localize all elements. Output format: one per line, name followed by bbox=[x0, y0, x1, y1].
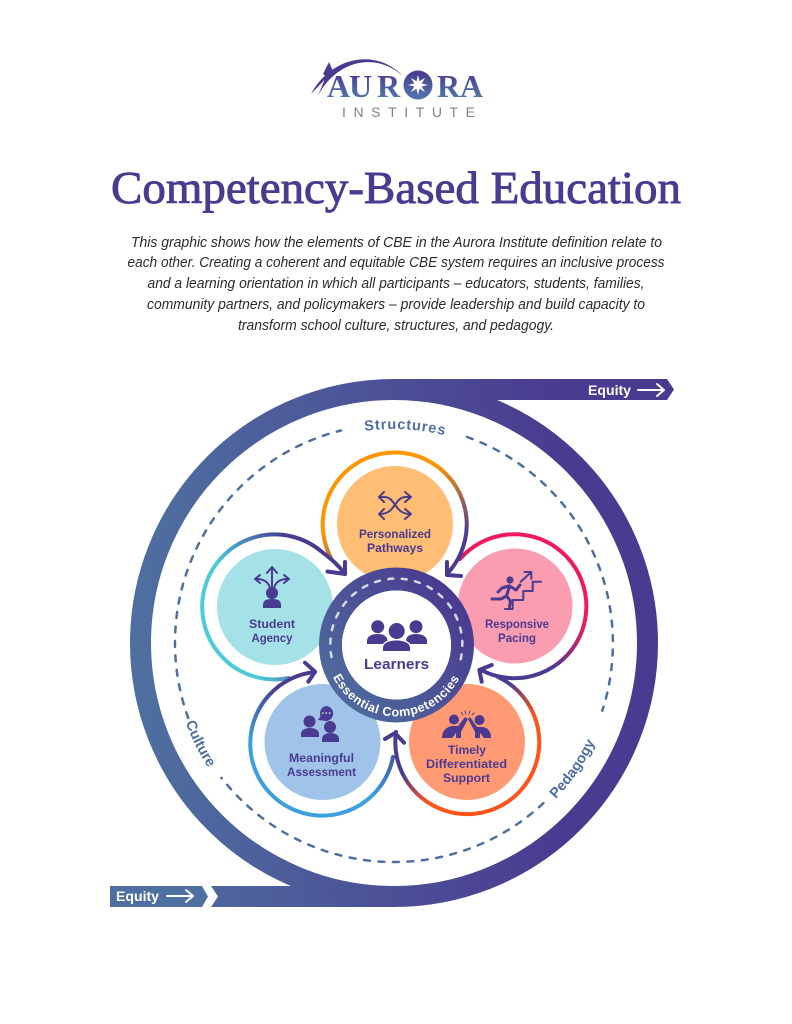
student label bbox=[249, 617, 295, 645]
responsive label bbox=[485, 617, 549, 645]
hub dashed road bbox=[330, 579, 462, 660]
student arc arrow bbox=[202, 534, 345, 679]
timely circle bbox=[409, 684, 525, 800]
intro text block: transform school culture, structures, and pedagogy. bbox=[238, 318, 554, 334]
meaningful arc arrow bbox=[250, 672, 393, 816]
element: Responsive Pacing bbox=[458, 534, 586, 678]
icon: learners group bbox=[367, 620, 427, 652]
logo: Aurora Institute bbox=[311, 59, 483, 120]
top equity band bbox=[394, 379, 674, 400]
personalized circle bbox=[337, 466, 453, 582]
logo wordmark: R bbox=[377, 68, 401, 104]
hub centre bbox=[342, 590, 451, 700]
timely arc arrow bbox=[395, 677, 539, 814]
timely label bbox=[426, 743, 507, 785]
responsive arc arrow bbox=[460, 534, 586, 678]
meaningful label: Meaningful bbox=[289, 751, 354, 765]
intro text block bbox=[128, 235, 664, 334]
timely label: Differentiated bbox=[426, 757, 507, 771]
meaningful label: Assessment bbox=[287, 765, 356, 779]
title: Competency-Based Education bbox=[111, 162, 681, 213]
personalized label bbox=[359, 527, 431, 555]
intro text block: This graphic shows how the elements of CBE in the Aurora Institute definition relate to bbox=[131, 235, 662, 251]
bottom equity band bbox=[211, 886, 394, 907]
top equity label bbox=[588, 382, 664, 398]
personalized label: Pathways bbox=[367, 541, 423, 555]
central learners hub bbox=[319, 568, 474, 722]
icon: shuffle arrows bbox=[379, 492, 411, 519]
element: Meaningful Assessment bbox=[250, 672, 393, 816]
element: Student Agency bbox=[202, 534, 345, 679]
icon: person with arrows bbox=[255, 567, 289, 608]
student label: Student bbox=[249, 617, 295, 631]
logo wordmark: A bbox=[460, 68, 483, 104]
logo wordmark: R bbox=[437, 68, 461, 104]
logo wordmark: O bbox=[404, 68, 429, 104]
timely label: Support bbox=[443, 771, 490, 785]
personalized label: Personalized bbox=[359, 527, 431, 541]
timely label: Timely bbox=[448, 743, 486, 757]
outer equity circle bbox=[140, 390, 648, 896]
label: Pedagogy: Pedagogy bbox=[549, 739, 596, 798]
logo swoosh bbox=[311, 59, 404, 96]
intro text block: each other. Creating a coherent and equitable CBE system requires an inclusive process bbox=[128, 255, 664, 271]
arrowheads bbox=[305, 562, 492, 743]
intro text block: community partners, and policymakers – provide leadership and build capacity to bbox=[147, 297, 645, 313]
logo star in O bbox=[404, 70, 432, 100]
element: Timely Differentiated Support bbox=[395, 677, 539, 814]
label: Culture: Culture bbox=[187, 720, 214, 766]
logo wordmark: A bbox=[327, 68, 350, 104]
student label: Agency bbox=[252, 631, 293, 645]
element: Personalized Pathways bbox=[323, 452, 467, 582]
hub ring bbox=[330, 579, 462, 711]
icon: high five bbox=[442, 711, 491, 738]
intro text block: and a learning orientation in which all participants – educators, students, families, bbox=[148, 276, 644, 292]
logo subtitle: INSTITUTE bbox=[342, 104, 475, 120]
meaningful circle bbox=[264, 684, 380, 800]
student circle bbox=[217, 549, 333, 665]
top equity label: Equity bbox=[588, 382, 631, 398]
icon: runner on stairs bbox=[492, 572, 541, 609]
learners label: Learners bbox=[364, 656, 429, 673]
bottom equity tag bbox=[110, 886, 208, 907]
meaningful label bbox=[287, 751, 356, 779]
responsive label: Pacing bbox=[498, 631, 536, 645]
personalized arc arrow bbox=[323, 452, 467, 574]
label: Structures: Structures bbox=[364, 420, 445, 435]
bottom equity label bbox=[116, 888, 193, 904]
responsive circle bbox=[458, 548, 572, 664]
essential competencies label: Essential Competencies bbox=[333, 673, 458, 718]
logo wordmark: U bbox=[349, 68, 372, 104]
equity ring band bbox=[110, 379, 674, 907]
dashed circle bbox=[175, 430, 613, 862]
responsive label: Responsive bbox=[485, 617, 549, 631]
bottom equity label: Equity bbox=[116, 888, 159, 904]
icon: two people talking bbox=[301, 706, 339, 742]
